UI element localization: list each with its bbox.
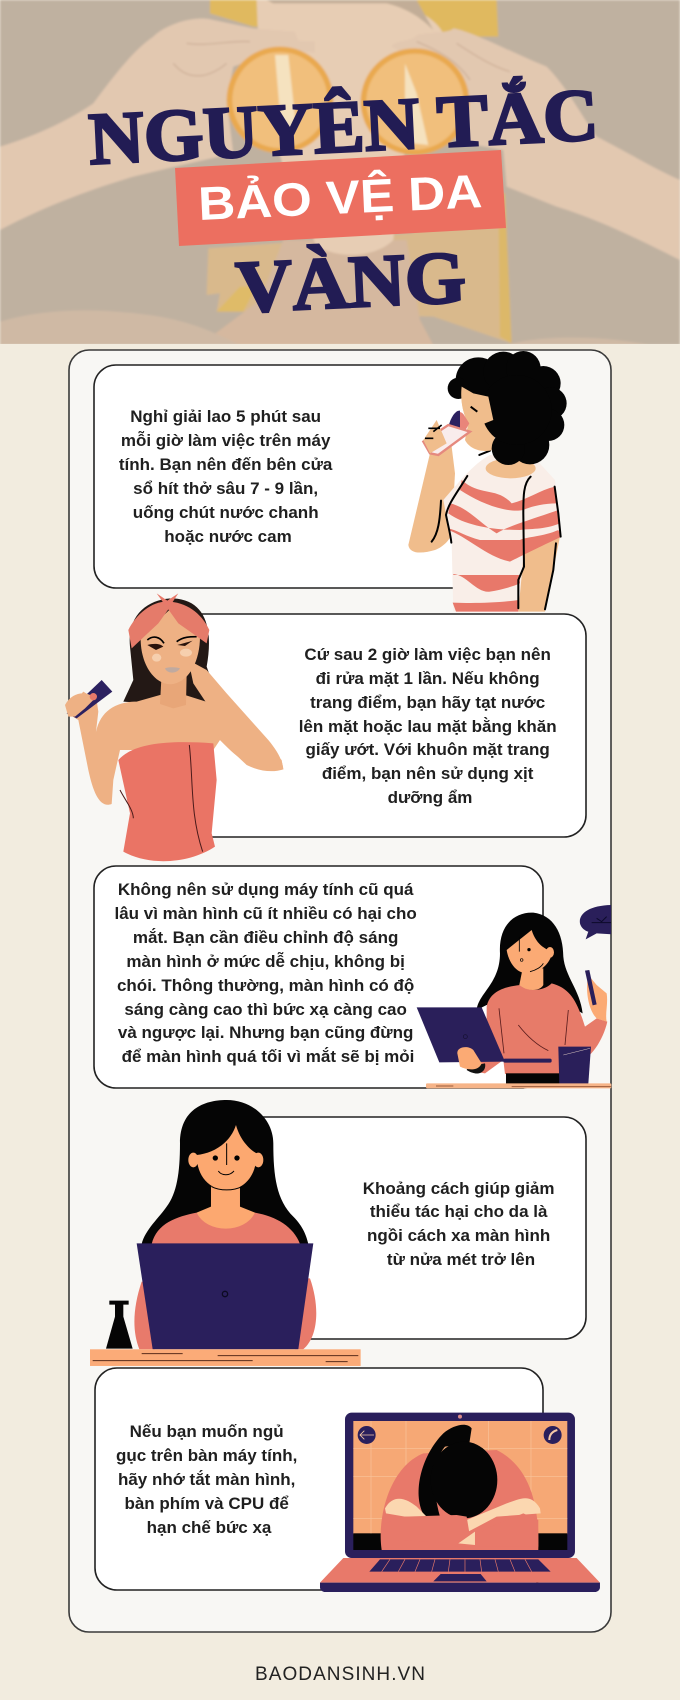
towel and head [210, 0, 498, 37]
main panel [69, 350, 611, 1632]
tip 2 text: Cứ sau 2 giờ làm việc bạn nên [304, 645, 551, 664]
tip 2 text: đi rửa mặt 1 lần. Nếu không [316, 669, 540, 688]
tip 1 text: hoặc nước cam [164, 527, 292, 546]
tip 4 text: Khoảng cách giúp giảm [363, 1179, 555, 1198]
tip 3 text: Không nên sử dụng máy tính cũ quá [118, 880, 414, 899]
tip 1 text: mỗi giờ làm việc trên máy [121, 431, 331, 450]
illustration: woman with headband and towel [65, 593, 283, 861]
tip 5 text: bàn phím và CPU để [124, 1494, 289, 1513]
tip 1 box [94, 365, 510, 588]
tip 3 text: lâu vì màn hình cũ ít nhiều có hại cho [114, 904, 417, 923]
tip 1 text: tính. Bạn nên đến bên cửa [119, 455, 333, 474]
back button icon [358, 1426, 376, 1444]
right hand and arm [438, 27, 680, 260]
tip 1 text: uống chút nước chanh [133, 503, 319, 522]
tip 5 text: gục trên bàn máy tính, [116, 1446, 297, 1465]
tip 5 box [95, 1368, 543, 1590]
tip 4 text: ngồi cách xa màn hình [367, 1226, 550, 1245]
tip 2 box [150, 614, 586, 837]
illustration: woman with tablet and speech bubble [417, 905, 613, 1088]
tip 5 text: hạn chế bức xạ [147, 1518, 272, 1537]
tip 2 text: dưỡng ẩm [388, 788, 472, 807]
tip 4 box [240, 1117, 586, 1339]
illustration: woman drinking from a glass [408, 351, 567, 612]
tip 2 text: điểm, bạn nên sử dụng xịt [322, 764, 534, 783]
tip 1 text: Nghỉ giải lao 5 phút sau [130, 407, 321, 426]
title: VÀNG: VÀNG [234, 237, 468, 329]
phone icon [544, 1426, 562, 1444]
title banner: BẢO VỆ DA [175, 150, 506, 246]
tip 3 text: và ngược lại. Nhưng bạn cũng đừng [118, 1023, 413, 1042]
footer source: BAODANSINH.VN [255, 1664, 425, 1685]
left orange [227, 47, 333, 153]
tip 2 text: trang điểm, bạn hãy tạt nước [310, 693, 545, 712]
tip 1 text: sổ hít thở sâu 7 - 9 lần, [133, 479, 318, 498]
speech bubble [580, 905, 613, 939]
title: NGUYÊN TẮC: NGUYÊN TẮC [87, 73, 600, 181]
tip 3 box [94, 866, 543, 1088]
tip 4 text: từ nửa mét trở lên [387, 1250, 535, 1269]
tip 3 text: để màn hình quá tối vì mắt sẽ bị mỏi [122, 1047, 414, 1066]
illustration: woman asleep on laptop [320, 1413, 600, 1592]
tip 3 text: màn hình ở mức dễ chịu, không bị [126, 952, 405, 971]
tip 2 text: giấy ướt. Với khuôn mặt trang [305, 740, 550, 759]
left hand and arm [0, 18, 259, 230]
tip 5 text: hãy nhớ tắt màn hình, [118, 1470, 295, 1489]
tip 3 text: mắt. Bạn cần điều chỉnh độ sáng [133, 928, 398, 947]
tip 3 text: chói. Thông thường, màn hình có độ [117, 976, 414, 995]
right orange [361, 48, 469, 155]
header photo: woman holding orange slices [0, 0, 680, 345]
illustration: smiling woman behind laptop [90, 1100, 361, 1366]
tip 3 text: sáng càng cao thì bức xạ càng cao [124, 1000, 407, 1019]
tip 5 text: Nếu bạn muốn ngủ [130, 1422, 284, 1441]
tip 4 text: thiểu tác hại cho da là [370, 1202, 548, 1221]
tip 2 text: lên mặt hoặc lau mặt bằng khăn [299, 717, 557, 736]
title banner: BẢO VỆ DA: BẢO VỆ DA [197, 164, 483, 230]
